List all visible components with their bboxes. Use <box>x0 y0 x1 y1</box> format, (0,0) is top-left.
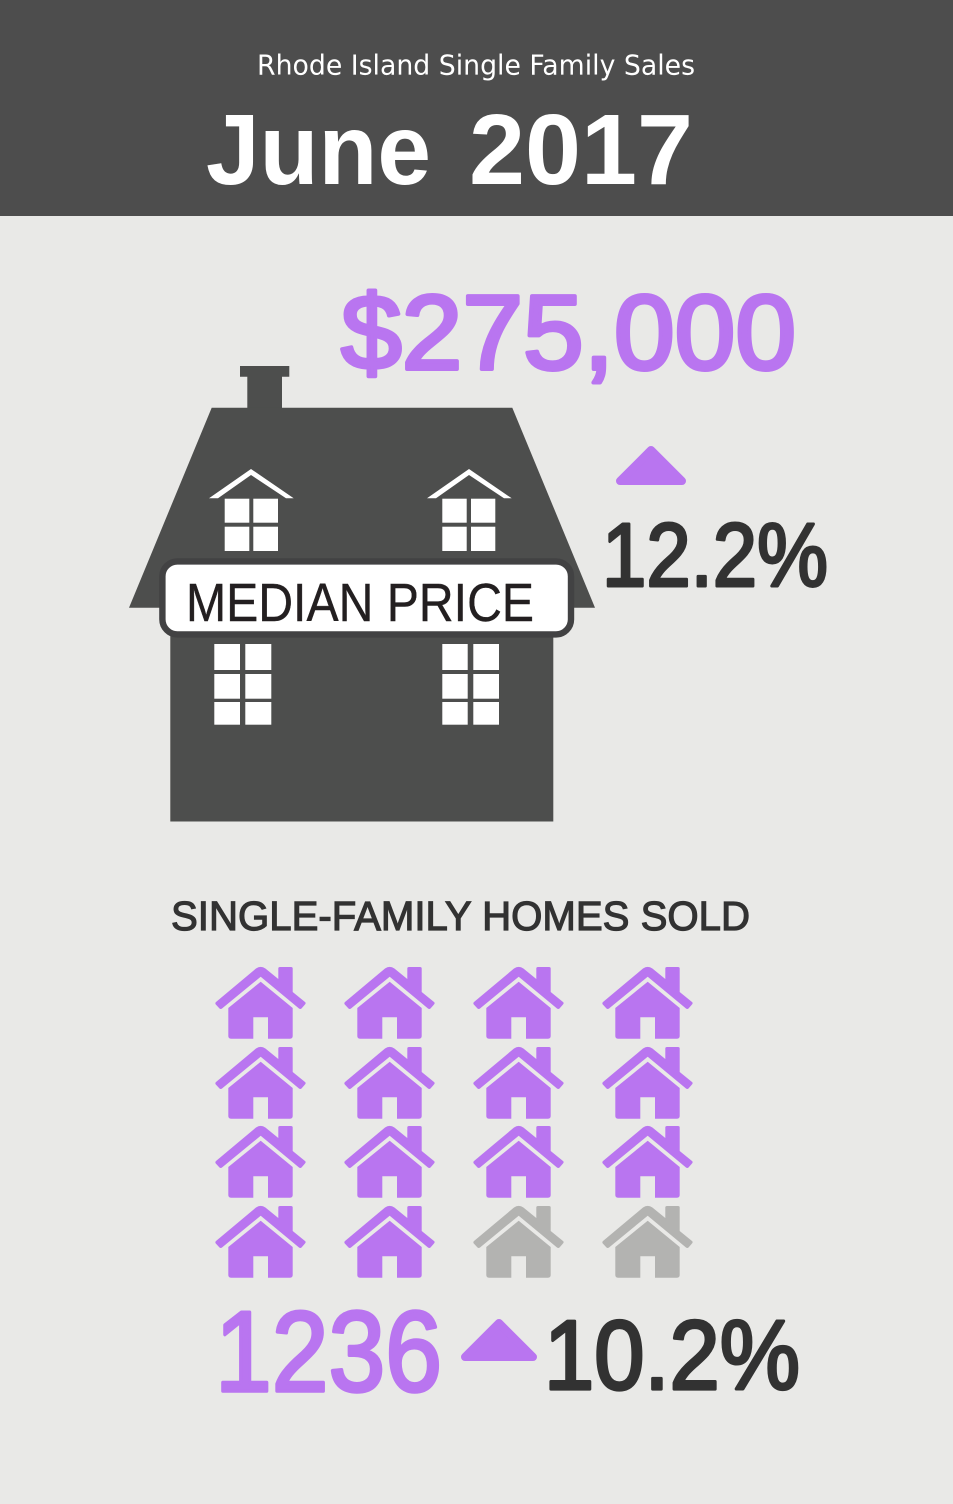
icon: house row 4 col 4 grey <box>602 1206 693 1278</box>
dormer right <box>427 469 512 551</box>
icon: house row 2 col 2 <box>344 1047 435 1119</box>
dormer left <box>209 469 294 551</box>
icon: house row 3 col 1 <box>215 1126 306 1198</box>
icon: large house <box>129 366 595 822</box>
icon: house row 1 col 4 <box>602 967 693 1039</box>
icon: house row 2 col 4 <box>602 1047 693 1119</box>
homes sold heading: SINGLE-FAMILY HOMES SOLD <box>171 893 750 939</box>
icon: up arrow sales <box>465 1323 533 1357</box>
sales change percentage: 10.2% <box>544 1300 800 1410</box>
icon: house row 4 col 3 grey <box>473 1206 564 1278</box>
icon: house row 1 col 3 <box>473 967 564 1039</box>
chimney <box>240 366 289 408</box>
icon: house row 3 col 2 <box>344 1126 435 1198</box>
icon: house row 1 col 2 <box>344 967 435 1039</box>
icon: house row 4 col 2 <box>344 1206 435 1278</box>
median price label: MEDIAN PRICE <box>186 573 534 633</box>
house body <box>170 600 553 822</box>
subtitle: Rhode Island Single Family Sales <box>257 48 695 82</box>
title: 2017 <box>469 94 693 206</box>
icon: up arrow price <box>620 450 682 481</box>
icon: house row 3 col 4 <box>602 1126 693 1198</box>
price change percentage: 12.2% <box>602 506 828 606</box>
icon grid: homes sold <box>215 967 693 1278</box>
lower window right <box>442 644 499 725</box>
icon: house row 2 col 3 <box>473 1047 564 1119</box>
title: June <box>206 94 431 206</box>
roof <box>129 408 595 608</box>
header band <box>0 0 953 216</box>
median price value: $275,000 <box>341 274 796 392</box>
homes sold count: 1236 <box>215 1289 442 1416</box>
icon: house row 3 col 3 <box>473 1126 564 1198</box>
icon: house row 1 col 1 <box>215 967 306 1039</box>
icon: house row 4 col 1 <box>215 1206 306 1278</box>
icon: house row 2 col 1 <box>215 1047 306 1119</box>
lower window left <box>214 644 271 725</box>
title <box>206 94 693 206</box>
